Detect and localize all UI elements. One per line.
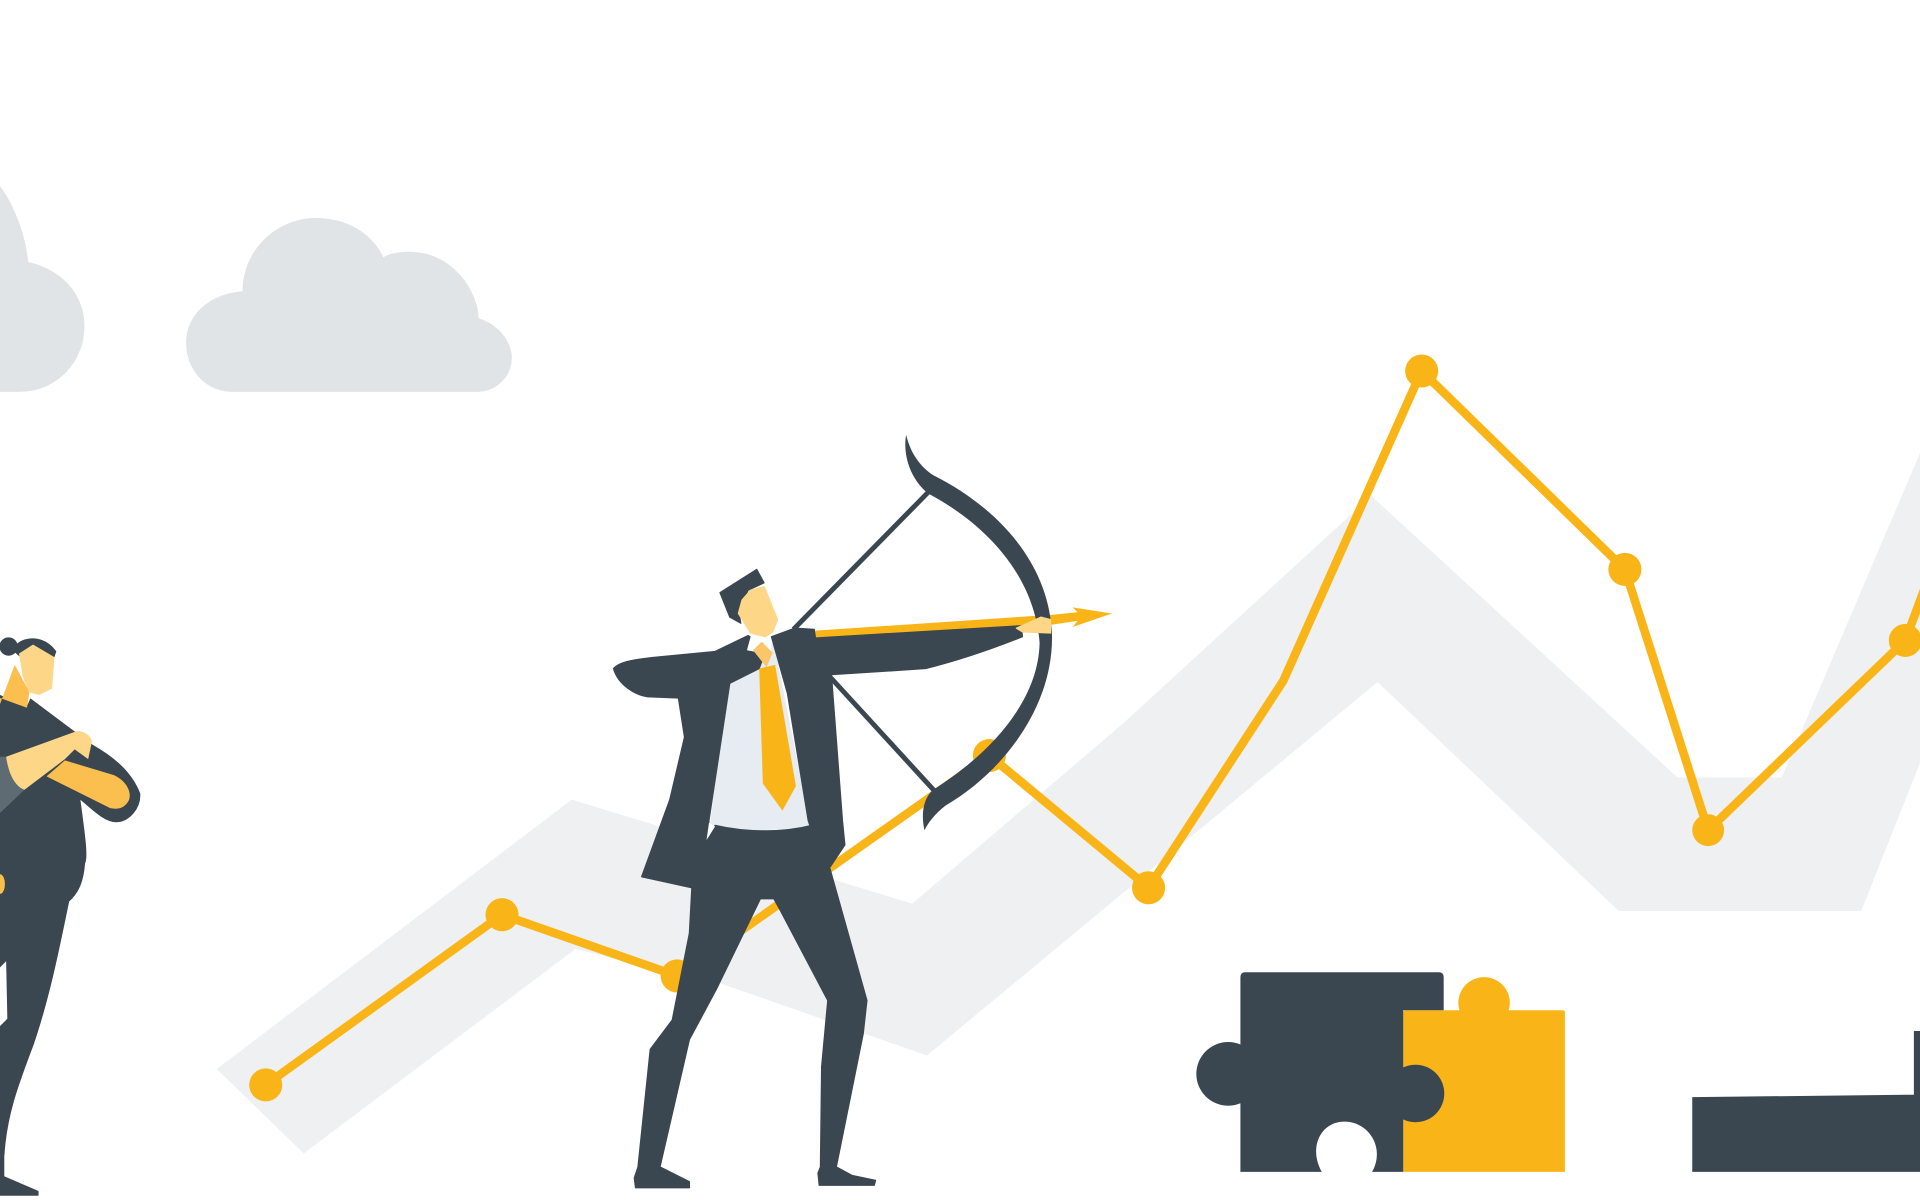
- woman: forearm: [47, 760, 130, 809]
- bow: [905, 435, 1052, 830]
- jacket vent sliver: [707, 823, 715, 840]
- figure: businessman archer: [613, 435, 1112, 1188]
- line chart: orange trend line with markers: [249, 354, 1920, 1101]
- woman: small hand: [0, 874, 5, 894]
- jacket right side and bow arm: [771, 626, 1022, 867]
- jacket left side and back arm: [613, 636, 767, 888]
- woman: leg gap: [0, 961, 7, 1026]
- woman: hand and arm: [6, 731, 92, 790]
- bow string: [793, 490, 938, 795]
- puzzle piece: orange: [1403, 977, 1565, 1172]
- puzzle piece: notch: [1316, 1122, 1377, 1173]
- collar: [747, 634, 771, 655]
- puzzle piece: dark: [1196, 972, 1444, 1172]
- hair: [720, 569, 764, 623]
- woman: neck: [0, 665, 29, 708]
- arrow: [816, 607, 1112, 638]
- trousers and left leg: [634, 825, 876, 1188]
- cloud: right: [186, 218, 512, 392]
- grey background trend band: [217, 453, 1920, 1153]
- tie: [753, 642, 796, 811]
- woman: torso and legs: [0, 696, 140, 1195]
- face: [738, 587, 778, 637]
- woman: hair: [0, 637, 56, 659]
- woman: face: [20, 645, 54, 694]
- dark block at right edge: [1692, 1031, 1920, 1172]
- figure: woman at left edge: [0, 637, 140, 1195]
- woman: grey top panel: [0, 757, 24, 813]
- puzzle pieces: [1196, 972, 1565, 1173]
- hand on bow: [1016, 617, 1051, 633]
- shirt: [709, 643, 811, 833]
- cloud: left, cropped by edge: [0, 186, 84, 392]
